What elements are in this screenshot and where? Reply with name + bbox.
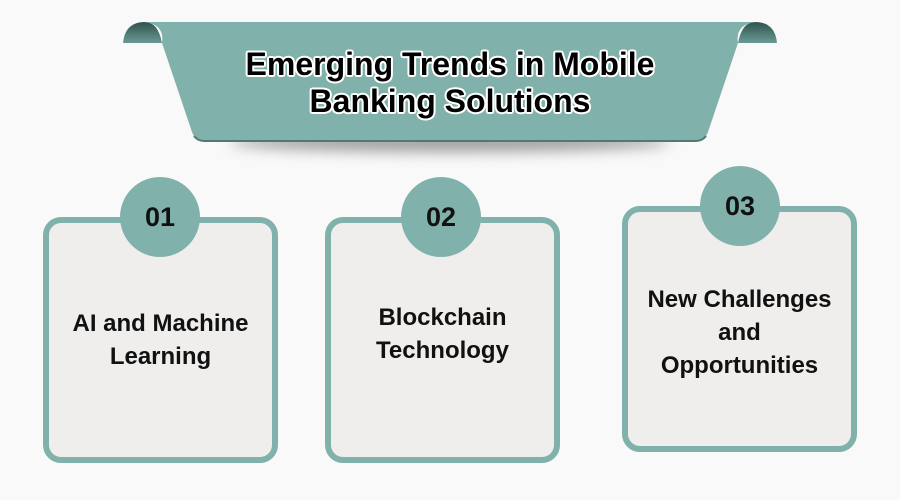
banner <box>123 22 777 161</box>
text 3 <box>647 286 832 379</box>
title: Banking Solutions <box>310 83 590 119</box>
text 1 <box>72 310 249 370</box>
card 2 <box>325 217 560 463</box>
number 02: 02 <box>426 202 456 232</box>
number 03 <box>700 166 780 246</box>
card 1 <box>43 217 278 463</box>
title: Emerging Trends in Mobile <box>246 46 654 82</box>
number 02 <box>401 177 481 257</box>
text 1: AI and Machine <box>72 310 249 337</box>
text 2 <box>376 304 509 364</box>
text 2: Blockchain <box>378 304 507 331</box>
number 01 <box>120 177 200 257</box>
text 3: Opportunities <box>661 352 818 379</box>
number 01: 01 <box>145 202 175 232</box>
text 1: Learning <box>110 343 211 370</box>
card 3 <box>622 206 857 452</box>
text 2: Technology <box>376 337 509 364</box>
title <box>246 46 656 120</box>
number 03: 03 <box>725 191 755 221</box>
text 3: and <box>718 319 761 346</box>
text 3: New Challenges <box>647 286 832 313</box>
